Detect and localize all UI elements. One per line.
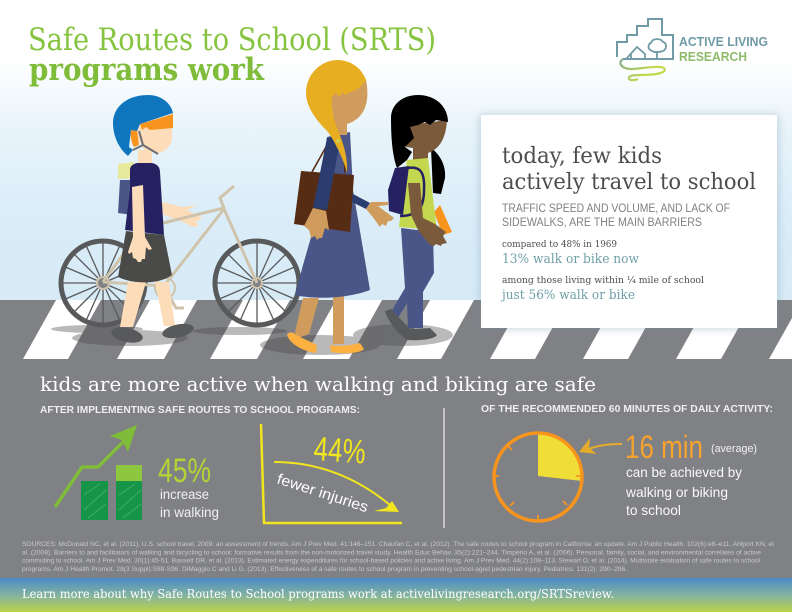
stat: 45% increase in walking: in walking bbox=[160, 504, 219, 520]
logo: Active Living Research: ACTIVE LIVING bbox=[679, 34, 768, 49]
child 2: girl with blonde hair bbox=[287, 60, 394, 353]
crosswalk stripes bbox=[23, 300, 792, 359]
left subheading: AFTER IMPLEMENTING SAFE ROUTES TO SCHOOL PROGRAMS: bbox=[40, 405, 360, 416]
right arm and hand bbox=[352, 194, 370, 209]
panel: today, few kids bbox=[481, 115, 777, 328]
chin strap bbox=[133, 131, 158, 154]
sources: commuting to school. Am J Prev Med. 30(1):45-51. Bassett DR, et al. (2013). Estimated energy expenditures for school-based policies and active living. Am J Prev Med. 44(2):108–113. Stewart O, et al. (2014). Multistate evaluation of safe routes to school bbox=[22, 558, 760, 564]
left hand bbox=[304, 208, 329, 240]
sources: al. (2008). Barriers to and facilitators of walking and bicycling to school: formative results from the non-motorized travel study. Health Educ Behav. 35(2):221–244. Timperio A, et al. (2006). Personal, family, social, and environmental correlates of active bbox=[22, 550, 762, 556]
footer band bbox=[0, 578, 792, 612]
card heading: today, few kids bbox=[502, 144, 662, 169]
sources: SOURCES: McDonald NC, et al. (2011). U.S. school travel, 2009: an assessment of trends. Am J Prev Med. 41:146–151. Chaufan C, et al. (2012). The safe routes to school program in California: an update. Am J Public Health. 102(6):e8–e11. Ahlport KN, et bbox=[22, 541, 774, 548]
arrow: to clock wedge bbox=[579, 438, 622, 454]
ponytail bbox=[431, 148, 445, 194]
barriers subheading: SIDEWALKS, ARE THE MAIN BARRIERS bbox=[502, 217, 702, 229]
sky background bbox=[0, 0, 792, 300]
title: programs work bbox=[29, 52, 265, 88]
dress bbox=[295, 132, 370, 298]
shoes bbox=[110, 321, 195, 345]
blonde hair bbox=[306, 60, 366, 173]
statistic: 13%: 13% walk or bike now bbox=[502, 252, 639, 267]
logo: Active Living Research bbox=[617, 19, 768, 80]
pants bbox=[391, 228, 434, 328]
hair bbox=[131, 114, 173, 147]
road and lower panel bbox=[0, 300, 792, 578]
right subheading: OF THE RECOMMENDED 60 MINUTES OF DAILY ACTIVITY: bbox=[481, 404, 773, 415]
stat: 45% increase in walking: 45% bbox=[158, 452, 211, 490]
statistic: 13%: compared to 48% in 1969 bbox=[502, 239, 617, 250]
shirt bbox=[125, 163, 164, 235]
skirt bbox=[118, 231, 172, 282]
child 1: boy with helmet bbox=[110, 95, 224, 345]
backpack bbox=[388, 166, 424, 216]
stat: 45% increase in walking: increase bbox=[160, 486, 209, 502]
barriers subheading: TRAFFIC SPEED AND VOLUME, AND LACK OF bbox=[502, 203, 730, 215]
statistic: 13% bbox=[502, 239, 639, 267]
chart: fewer injuries bbox=[261, 424, 402, 523]
stat: 45% increase in walking bbox=[158, 452, 219, 520]
statistic: 56% bbox=[500, 275, 704, 303]
statistic: 56%: among those living within ¼ mile of school bbox=[502, 275, 704, 286]
legs bbox=[295, 293, 344, 344]
arrow: upward trend bbox=[55, 425, 137, 507]
barriers subheading bbox=[502, 203, 730, 229]
left arm bbox=[313, 137, 339, 210]
tote bag bbox=[294, 138, 354, 232]
sources: programs. Am J Health Promot. 28(3 Suppl):S89-S96. DiMaggio C and Li G. (2013). Effectiveness of a safe routes to school program in preventing school-aged pedestrian injury. Pediatrics. 131(2): 290–296. bbox=[22, 566, 627, 573]
chart: clock, 16 of 60 minutes bbox=[493, 433, 582, 521]
chart: walking increase bars bbox=[81, 465, 142, 520]
stat: 16 min bbox=[625, 429, 757, 518]
fewer injuries label: fewer injuries bbox=[275, 471, 370, 516]
face bbox=[135, 120, 172, 153]
bicycle bbox=[60, 186, 300, 326]
section heading: kids are more active when walking and biking are safe bbox=[40, 372, 596, 396]
title: Safe Routes to School (SRTS) bbox=[28, 22, 436, 58]
face bbox=[327, 80, 367, 135]
stat: 16 min: (average) bbox=[711, 443, 757, 455]
shadows on the road bbox=[51, 324, 453, 355]
44% label: 44% bbox=[312, 430, 367, 472]
face bbox=[406, 120, 447, 160]
hair band bbox=[336, 139, 340, 143]
shoes bbox=[287, 332, 364, 353]
helmet bbox=[113, 95, 173, 156]
stat: 16 min: to school bbox=[626, 502, 681, 518]
shirt bbox=[399, 158, 437, 230]
black hair bbox=[391, 95, 448, 168]
stat: 16 min: 16 min bbox=[625, 429, 703, 465]
back arm and hand bbox=[162, 202, 202, 227]
bike top tube bbox=[163, 208, 224, 223]
statistic: 56%: just 56% walk or bike bbox=[500, 288, 635, 303]
book bbox=[434, 205, 452, 235]
arm and hand bbox=[408, 183, 447, 246]
backpack bbox=[118, 162, 134, 215]
stat: 16 min: walking or biking bbox=[625, 484, 728, 500]
footer call to action: Learn more about why Safe Routes to School programs work at activelivingresearch.org/SRTSreview. bbox=[22, 587, 614, 601]
title bbox=[28, 22, 436, 88]
front arm and hand bbox=[128, 185, 152, 262]
card heading bbox=[502, 144, 756, 195]
logo: Active Living Research: RESEARCH bbox=[679, 49, 747, 64]
child 3: girl with black hair bbox=[385, 95, 452, 340]
divider bbox=[443, 408, 445, 528]
stat: 16 min: can be achieved by bbox=[626, 464, 742, 480]
sources bbox=[22, 541, 774, 573]
shoes bbox=[385, 309, 437, 340]
card heading: actively travel to school bbox=[502, 170, 756, 195]
card shadow bbox=[479, 114, 779, 330]
neck and legs bbox=[120, 150, 175, 327]
